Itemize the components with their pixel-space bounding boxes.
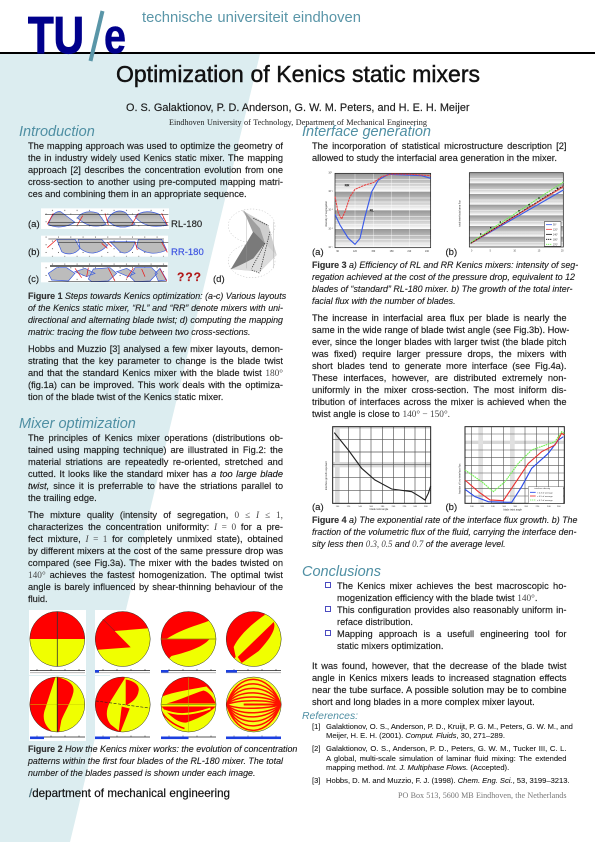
title: Optimization of Kenics static mixers <box>116 61 480 87</box>
text: conclusions list: This configuration provides also reasonably uniform in- <box>337 605 566 615</box>
reference 3: [3] <box>312 776 320 784</box>
text: conclusions list: mogenization efficiency with the blade twist 140°. <box>337 593 537 604</box>
text: introduction paragraph: approach [2] describes the concentration evolution from one <box>28 165 283 175</box>
chart: figure 4a: 220 <box>403 506 407 508</box>
chart: figure 4b <box>458 426 565 511</box>
text: closing paragraph: It was found, however, that the decrease of the blade twist <box>312 661 566 671</box>
progress bars <box>30 669 281 739</box>
label (d): (d) <box>213 274 225 285</box>
text: interface flux paragraph: was fixed) require larger pressure drops, the mixers with <box>312 349 566 359</box>
figure 1: mixer layouts a, b, c <box>41 208 169 282</box>
caption: figure 3: Figure 3 a) Efficiency of RL and RR Kenics mixers: intensity of seg- <box>312 260 578 270</box>
reference 1 <box>312 722 573 740</box>
text: interface paragraph: The incorporation of statistical microstructure description [2] <box>312 141 566 151</box>
text: principles paragraph: the trailing edge. <box>28 493 97 503</box>
strip b: RR-180 layout <box>47 239 168 254</box>
pattern: blade 4 <box>226 676 282 732</box>
heading: Introduction: Introduction <box>19 124 95 140</box>
text: mixture quality paragraph: by different mixers at the cost of the same pressure drop was <box>28 546 283 556</box>
caption: figure 2: patterns within the first four blades of the RL-180 mixer. The total <box>28 756 283 766</box>
text: introduction paragraph: cross-section to another using pre-computed mapping matri- <box>28 177 283 187</box>
affiliation: Eindhoven University of Technology, Department of Mechanical Engineering <box>169 118 427 127</box>
chart: figure 4b: 180 <box>513 506 518 508</box>
text: introduction paragraph: The mapping approach was used to optimize the geometry of <box>28 141 283 151</box>
chart: figure 4b: 200 <box>524 506 529 508</box>
label (a): (a) <box>28 219 40 230</box>
text: interface flux paragraph <box>312 313 569 420</box>
chart: figure 4a: blade twist angle <box>370 508 389 511</box>
pattern: blade 2b <box>94 676 150 732</box>
chart: figure 3b: 270° <box>553 244 558 246</box>
chart: figure 3a: 10⁻⁴ <box>328 245 333 249</box>
pattern: blade 1a <box>94 611 150 667</box>
strip c: unknown layout <box>48 266 167 282</box>
label 4(b): (b) <box>446 502 457 513</box>
chart: figure 4b: 260 <box>557 506 561 508</box>
text: principles paragraph: The principles of Kenics mixer operations (distributions ob- <box>28 433 283 443</box>
text: closing paragraph: short and long blades in a more complex mixer layout. <box>312 697 535 707</box>
chart: figure 3a: 10⁻² <box>328 209 333 212</box>
caption: figure 4: sity less then 0.3, 0.5 and 0.7 of the average level. <box>312 539 506 549</box>
text: introduction paragraph <box>28 141 284 200</box>
label (b): (b) <box>28 247 40 258</box>
text: conclusions list <box>337 581 566 652</box>
text: interface paragraph: allowed to study the interfacial area generation in the mixer. <box>312 153 557 163</box>
text: Hobbs and Muzzio paragraph <box>28 344 283 402</box>
reference 1: Galaktionov, O. S., Anderson, P. D., Kruijt, P. G. M., Peters, G. W. M., and <box>326 722 573 730</box>
text: interface flux paragraph: short blades tend to generate more interface (see Fig.4a). <box>312 361 566 371</box>
figure 1d: flow tube in blade mesh <box>228 208 277 278</box>
figure 2: concentration patterns <box>29 610 282 741</box>
chart: figure 3a: RL <box>370 209 374 213</box>
caption: figure 1: directional and alternating blade twist; d) computing the mapping <box>28 315 283 325</box>
label (c): (c) <box>28 274 39 285</box>
chart: figure 3b: total interfacial area flux <box>459 200 462 227</box>
chart: figure 3a: intensity of segregation <box>325 200 328 227</box>
reference 2 <box>312 744 566 772</box>
chart: figure 4a <box>325 426 432 511</box>
chart: figure 4b: interface density <box>534 487 551 490</box>
chart: figure 3b <box>458 172 564 252</box>
heading: Interface generation: Interface generation <box>302 124 431 140</box>
bullet icon 3 <box>325 630 331 636</box>
caption: figure 1 <box>28 291 286 337</box>
pattern: 0 blades <box>30 611 86 667</box>
university name: technische universiteit eindhoven <box>142 10 361 26</box>
text: closing paragraph <box>312 661 566 708</box>
text: conclusions list: reface distribution. <box>337 617 413 627</box>
text: closing paragraph: angle in Kenics mixers leads to increased stagnation effects <box>312 673 566 683</box>
chart: figure 3b: 90° <box>553 225 557 227</box>
chart: figure 4a: 260 <box>424 506 428 508</box>
chart: figure 4a: 180 <box>381 506 385 508</box>
chart: figure 4b: fraction of low-interface flux <box>459 463 462 494</box>
text: mixture quality paragraph: compared (see Fig.3a). The mixer with the bades twisted on <box>28 558 283 568</box>
caption: figure 3: facial flux with the number of blades. <box>312 296 456 306</box>
text: interface flux paragraph: uniformly in the mixer cross-section. The most iniform dis- <box>312 385 566 395</box>
caption: figure 1: Figure 1 Steps towards Kenics optimization: (a-c) Various layouts <box>28 291 286 301</box>
caption: figure 2 <box>28 744 297 778</box>
pattern: blade 3 <box>160 676 216 732</box>
chart: figure 3b: 140° <box>553 234 558 236</box>
text: conclusions list: Mapping approach is a usefull engineering tool for <box>337 629 566 639</box>
caption: figure 4: Figure 4 a) The exponential rate of the interface flux growth. b) The <box>312 515 577 525</box>
label 3(b): (b) <box>446 247 457 258</box>
chart: figure 4b: < 0.5 of average <box>537 495 553 498</box>
text: introduction paragraph: the in industry widely used Kenics static mixer. The mapping <box>28 153 283 163</box>
chart: figure 3a: 10⁰ <box>328 172 332 175</box>
chart: figure 4b: 140 <box>491 506 495 508</box>
label 4(a): (a) <box>312 502 324 513</box>
chart: figure 3a: RR <box>345 184 350 188</box>
chart: figure 4a: 160 <box>369 506 374 508</box>
bullet icon 2 <box>325 606 331 612</box>
text: principles paragraph: material striations are repeatedly re-oriented, stretched and <box>28 457 283 467</box>
text: conclusions list: static mixers optimization. <box>337 641 443 651</box>
chart: figure 4b: 160 <box>502 506 507 508</box>
text: mixture quality paragraph: angle is barely influenced by shear-thinning behaviour of the <box>28 582 283 592</box>
reference 2: A global, multi-scale simulation of laminar fluid mixing: The extended <box>326 754 566 763</box>
chart: figure 4b: < 0.7 of average <box>537 499 553 502</box>
label RL-180: RL-180 <box>171 219 202 230</box>
chart: figure 4a: 100 <box>336 506 340 508</box>
label question marks: ??? <box>177 270 202 284</box>
caption: figure 3: blades of “standard” RL-180 mixer. b) The growth of the total inter- <box>312 284 572 294</box>
reference 2: [2] <box>312 744 320 753</box>
chart: figure 4b: 240 <box>547 506 551 508</box>
text: principles paragraph: tained using mapping technique) are illustrated in Fig.2: the <box>28 445 283 455</box>
text: Hobbs and Muzzio paragraph: tion of the blade twist of the Kenics static mixer. <box>28 392 223 402</box>
text: interface paragraph <box>312 141 566 164</box>
text: mixture quality paragraph: 140° achieves the fastest homogenization. The optimal twist <box>28 570 283 581</box>
chart: figure 3b: 120° <box>553 229 558 231</box>
text: principles paragraph: cutted. It looks like the standard mixer has a too large blade <box>28 469 283 479</box>
caption: figure 3 <box>312 260 578 306</box>
chart: figure 4a: 140 <box>358 506 363 508</box>
text: mixture quality paragraph <box>28 510 283 604</box>
reference 2: Galaktionov, O. S., Anderson, P. D., Peters, G. W. M., Tucker III, C. L. <box>326 744 566 753</box>
text: mixture quality paragraph: characterizes the concentration uniformity: I = 0 for a pre- <box>28 522 283 533</box>
text: interface flux paragraph: These interfaces, however, are distributed extremely non- <box>312 373 566 383</box>
caption: figure 4: fraction of the volumetric flux of the fluid, carrying the interface den- <box>312 527 576 537</box>
text: introduction paragraph: ces and combining them in an appropriate sequence. <box>28 189 247 199</box>
text: closing paragraph: near the tube surface. A possible solution may be to combine <box>312 685 566 695</box>
chart: figure 4b: < 0.3 of average <box>537 491 553 494</box>
text: interface flux paragraph: same in the wide range of blade twist angle (see Fig.3b). How- <box>312 325 569 335</box>
reference 2: mapping method. Int. J. Multiphase Flows. (Accepted). <box>326 763 509 772</box>
chart: figure 4a: 240 <box>413 506 418 508</box>
pattern: blade 1c <box>226 611 282 667</box>
chart: figure 4a: interface growth exponent <box>325 461 328 490</box>
text: Hobbs and Muzzio paragraph: Hobbs and Muzzio [3] analysed a few mixer layouts, demon- <box>28 344 283 354</box>
chart: figure 3b: 180° <box>553 239 558 241</box>
strip a: RL-180 layout <box>45 211 168 227</box>
reference 3: Hobbs, D. M. and Muzzio, F. J. (1998). Chem. Eng. Sci., 53, 3199–3213. <box>326 776 570 784</box>
text: mixture quality paragraph: The mixture quality (intensity of segregation, 0 ≤ I ≤ 1, <box>28 510 283 521</box>
authors: O. S. Galaktionov, P. D. Anderson, G. W. M. Peters, and H. E. H. Meijer <box>126 102 470 114</box>
label 3(a): (a) <box>312 247 324 258</box>
text: mixture quality paragraph: fluid. <box>28 594 48 604</box>
text: interface flux paragraph: ever, since the longer blades with larger twist (the blade pitch <box>312 337 566 347</box>
bullet icon 1 <box>325 582 331 588</box>
text: interface flux paragraph: twist angle is close to 140° − 150°. <box>312 409 450 420</box>
chart: figure 4b: 120 <box>480 506 485 508</box>
chart: figure 4b: 100 <box>470 506 474 508</box>
pattern: blade 2a <box>30 676 86 732</box>
chart: figure 4a: 120 <box>347 506 351 508</box>
caption: figure 2: Figure 2 How the Kenics mixer works: the evolution of concentration <box>28 744 297 754</box>
chart: figure 4a: 200 <box>392 506 396 508</box>
heading: References: References: <box>302 711 358 722</box>
text: mixture quality paragraph: fect mixture, I = 1 for completely unmixed state), obtained <box>28 534 283 545</box>
caption: figure 1: matrix: tracing the flow tube between two cross-sections. <box>28 327 250 337</box>
chart: figure 3a: 10⁻¹ <box>328 190 333 193</box>
caption: figure 1: of the Kenics static mixer, “RL” and “RR” denote mixers with uni- <box>28 303 283 313</box>
chart: figure 3a <box>325 172 432 252</box>
header rule <box>0 52 595 54</box>
text: Hobbs and Muzzio paragraph: and that the standard Kenics mixer with the blade twist 180° <box>28 368 283 379</box>
text: interface flux paragraph: The increase in interfacial area flux per blade is nearly the <box>312 313 566 323</box>
label RR-180: RR-180 <box>171 247 204 258</box>
text: conclusions list: The Kenics mixer achieves the best macroscopic ho- <box>337 581 566 591</box>
text: interface flux paragraph: tribution of interfaces across the mixer is achieved when the <box>312 397 566 407</box>
text: Hobbs and Muzzio paragraph: strating that the key parameter to change is the blade twist <box>28 356 283 366</box>
heading: Mixer optimization: Mixer optimization <box>19 416 136 432</box>
reference 1: Meijer, H. E. H. (2001). Comput. Fluids, 30, 271–289. <box>326 731 505 740</box>
caption: figure 4 <box>312 515 578 549</box>
heading: Conclusions: Conclusions <box>302 564 381 580</box>
pattern: blade 1b <box>160 611 216 667</box>
footer: department: /department of mechanical engineering <box>29 787 230 800</box>
caption: figure 3: regation achieved at the cost of the pressure drop, equivalent to 12 <box>312 272 575 282</box>
chart: figure 4b: 220 <box>536 506 540 508</box>
text: principles paragraph: twist, since it is preferrable to have the striations parallel to <box>28 481 283 491</box>
footer: address: PO Box 513, 5600 MB Eindhoven, the Netherlands <box>398 791 566 800</box>
reference 1: [1] <box>312 722 320 730</box>
chart: figure 3a: 10⁻³ <box>328 227 333 230</box>
caption: figure 2: number of the blades passed is shown under each image. <box>28 768 255 778</box>
text: Hobbs and Muzzio paragraph: (fig.1a) can be improved. This work deals with the optimiza- <box>28 380 283 390</box>
text: principles paragraph <box>28 433 283 504</box>
